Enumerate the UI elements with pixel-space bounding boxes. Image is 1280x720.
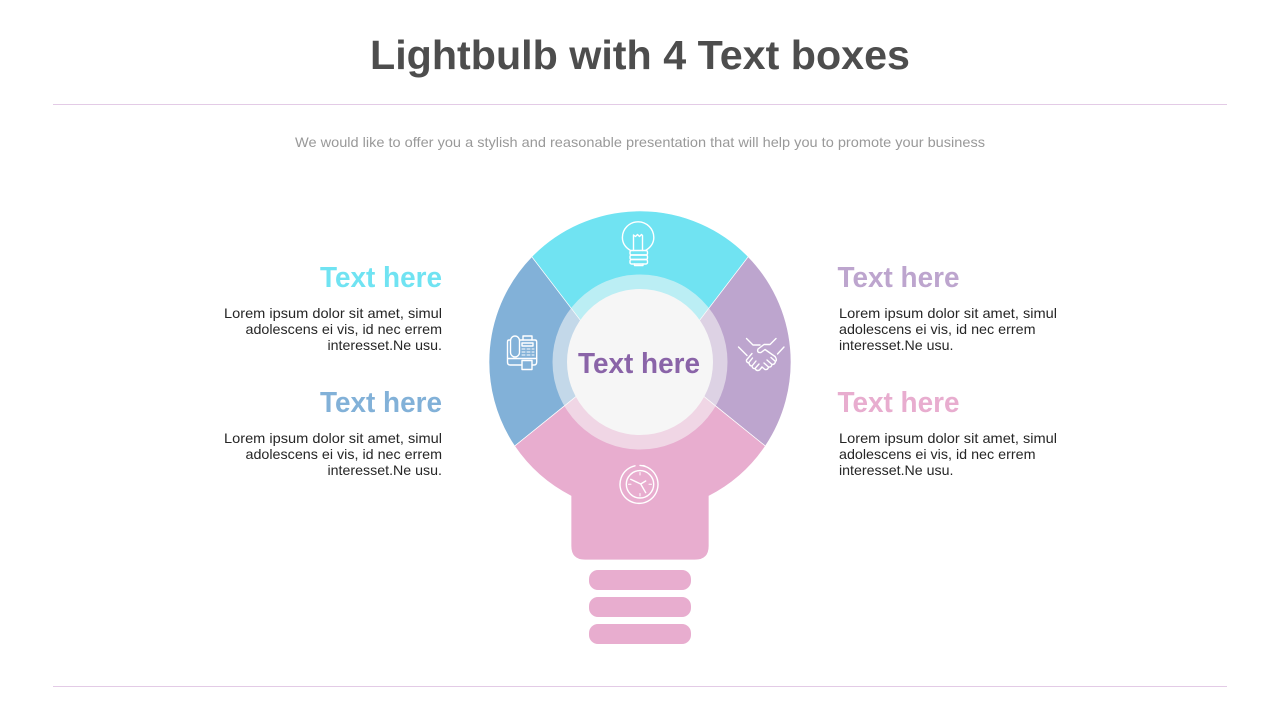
text box: pink: interesset.Ne usu.	[839, 462, 954, 478]
text box: blue	[224, 387, 442, 478]
icon: lightbulb	[622, 222, 654, 266]
centre circle	[567, 289, 713, 435]
text box: cyan: Text here	[320, 262, 442, 294]
lightbulb diagram	[489, 211, 791, 644]
text box: blue: adolescens ei vis, id nec errem	[246, 446, 442, 462]
text box: blue: Text here	[320, 387, 442, 419]
text box: blue: interesset.Ne usu.	[328, 462, 442, 478]
text box: purple: adolescens ei vis, id nec errem	[839, 321, 1036, 337]
text box: blue: Lorem ipsum dolor sit amet, simul	[224, 430, 442, 446]
text box: pink: Lorem ipsum dolor sit amet, simul	[839, 430, 1057, 446]
bulb segment: bottom pink with neck	[515, 345, 765, 560]
text box: purple	[838, 262, 1057, 353]
text box: pink	[838, 387, 1057, 478]
translucent ring	[552, 274, 728, 450]
bulb screw thread 3	[589, 624, 691, 644]
text box: purple: Text here	[838, 262, 960, 294]
icon: handshake	[738, 338, 784, 370]
text box: cyan: adolescens ei vis, id nec errem	[246, 321, 442, 337]
bulb screw thread 2	[589, 597, 691, 617]
text box: cyan	[224, 262, 442, 353]
text box: pink: adolescens ei vis, id nec errem	[839, 446, 1036, 462]
bulb screw thread 1	[589, 570, 691, 590]
text box: cyan: interesset.Ne usu.	[328, 337, 442, 353]
text box: pink: Text here	[838, 387, 960, 419]
title: Lightbulb with 4 Text boxes	[370, 32, 910, 78]
text box: purple: Lorem ipsum dolor sit amet, simul	[839, 305, 1057, 321]
bulb segment: top cyan	[532, 211, 748, 399]
icon: clock	[620, 465, 658, 503]
subtitle: We would like to offer you a stylish and reasonable presentation that will help you to promote your business	[295, 134, 985, 150]
bulb segment: left blue	[489, 257, 610, 446]
bulb segment: right purple	[670, 257, 791, 446]
text box: purple: interesset.Ne usu.	[839, 337, 954, 353]
icon: fax machine	[508, 336, 537, 370]
centre label: Text here	[578, 348, 700, 380]
text box: cyan: Lorem ipsum dolor sit amet, simul	[224, 305, 442, 321]
